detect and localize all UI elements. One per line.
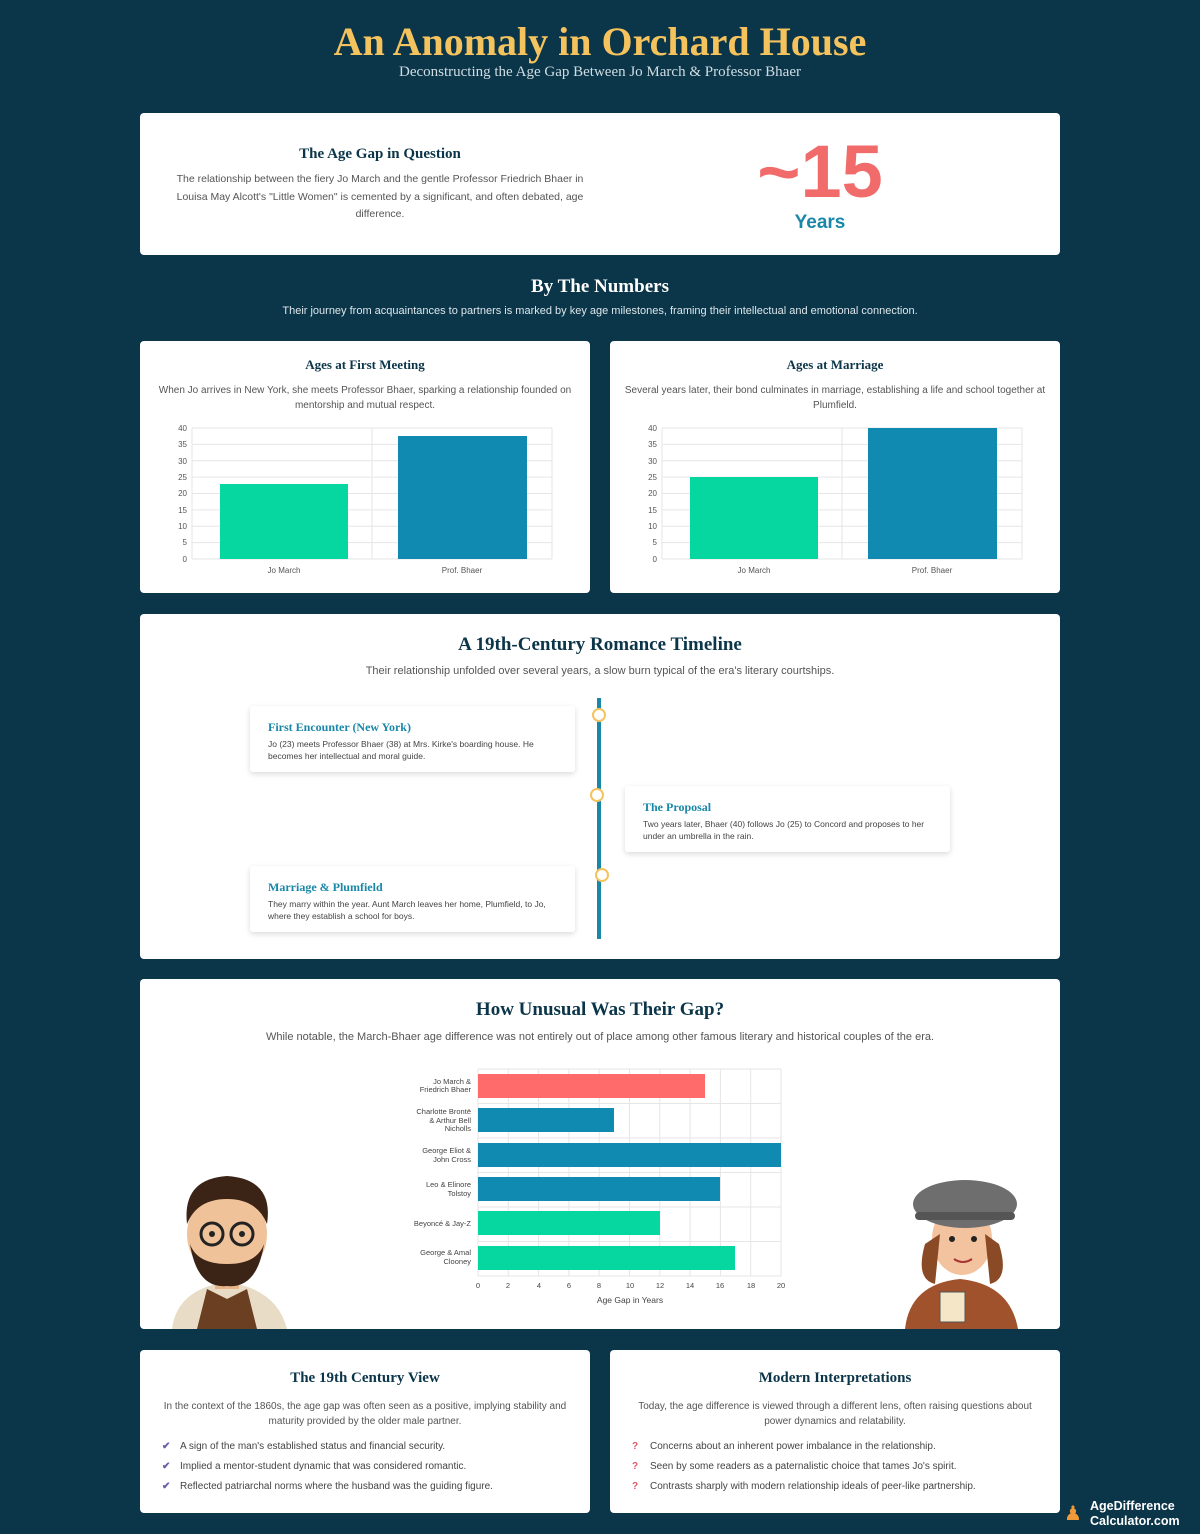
horizontal bar chart (414, 1068, 785, 1305)
panel: modern interpretations (610, 1350, 1060, 1513)
bar chart: 0 (653, 555, 658, 564)
panel: timeline: Their relationship unfolded over several years, a slow burn typical of the era's literary courtships. (366, 665, 834, 677)
horizontal bar chart: George & Amal (420, 1248, 471, 1257)
panel: modern interpretations: Contrasts sharply with modern relationship ideals of peer-like partnership. (650, 1481, 976, 1492)
panel: 19th century view: In the context of the 1860s, the age gap was often seen as a positive, implying stability and maturity provided by the older male partner. (164, 1401, 566, 1427)
panel: modern interpretations: Today, the age difference is viewed through a different lens, often raising questions about power dynamics and relatability. (638, 1401, 1032, 1427)
bar chart: Prof. Bhaer (442, 566, 483, 575)
event: proposal: Two years later, Bhaer (40) follows Jo (25) to Concord and proposes to her under an umbrella in the rain. (643, 819, 924, 841)
bar chart: 5 (183, 538, 188, 547)
bar chart: 5 (653, 538, 658, 547)
bar chart: 30 (178, 457, 188, 466)
event: first encounter: First Encounter (New York) (268, 720, 411, 734)
heading: by the numbers: By The Numbers (531, 276, 669, 297)
bar chart: 10 (648, 522, 658, 531)
logo: Calculator.com (1090, 1514, 1180, 1528)
horizontal bar chart: Tolstoy (448, 1189, 471, 1198)
event: marriage: Marriage & Plumfield (268, 880, 383, 894)
horizontal bar chart: Nicholls (445, 1124, 471, 1133)
bar chart: 20 (178, 489, 188, 498)
panel: comparison (140, 979, 1060, 1329)
bar chart: Jo March (268, 566, 300, 575)
text: by the numbers: Their journey from acquaintances to partners is marked by key age milestones, framing their intellectual and emotional connection. (282, 305, 918, 317)
horizontal bar chart: 2 (506, 1281, 510, 1290)
years label: Years (795, 212, 845, 233)
bar chart: 15 (648, 506, 658, 515)
horizontal bar chart: Beyoncé & Jay-Z (414, 1219, 471, 1228)
bar chart (178, 424, 552, 575)
bar chart: 40 (648, 424, 658, 433)
event: proposal: The Proposal (643, 800, 711, 814)
logo: AgeDifference (1090, 1499, 1175, 1513)
bar chart: 25 (178, 473, 188, 482)
bar chart: 20 (648, 489, 658, 498)
horizontal bar chart: & Arthur Bell (429, 1116, 471, 1125)
heading: The Age Gap in Question (299, 146, 461, 162)
panel: comparison: How Unusual Was Their Gap? (476, 999, 724, 1020)
horizontal bar chart: George Eliot & (422, 1146, 471, 1155)
bar chart: 35 (178, 440, 188, 449)
panel: modern interpretations: ? (632, 1481, 638, 1492)
panel: modern interpretations: Modern Interpretations (759, 1370, 911, 1386)
bar chart: 30 (648, 457, 658, 466)
panel: comparison: While notable, the March-Bhaer age difference was not entirely out of place among other famous literary and historical couples of the era. (266, 1031, 934, 1043)
bar chart: Prof. Bhaer (912, 566, 953, 575)
panel: marriage (610, 341, 1060, 593)
logo: ♟ (1064, 1503, 1082, 1525)
icon: professor bhaer illustration (172, 1176, 287, 1329)
horizontal bar chart: 8 (597, 1281, 601, 1290)
panel: 19th century view (140, 1350, 590, 1513)
horizontal bar chart: John Cross (433, 1155, 471, 1164)
bar chart: 15 (178, 506, 188, 515)
panel: modern interpretations: ? (632, 1441, 638, 1452)
horizontal bar chart: Age Gap in Years (597, 1295, 663, 1305)
panel: first meeting: Ages at First Meeting (305, 357, 425, 372)
horizontal bar chart: 6 (567, 1281, 571, 1290)
horizontal bar chart: 20 (777, 1281, 785, 1290)
title: An Anomaly in Orchard House (334, 19, 866, 64)
panel: first meeting: When Jo arrives in New York, she meets Professor Bhaer, sparking a relationship founded on mentorship and mutual respect. (159, 385, 571, 411)
panel: 19th century view: ✔ (162, 1481, 170, 1492)
panel: 19th century view: A sign of the man's established status and financial security. (180, 1441, 445, 1452)
event: marriage: They marry within the year. Aunt March leaves her home, Plumfield, to Jo, where they establish a school for boys. (268, 899, 546, 921)
horizontal bar chart: 16 (716, 1281, 724, 1290)
panel: timeline (140, 614, 1060, 959)
horizontal bar chart: Jo March & (433, 1077, 471, 1086)
horizontal bar chart: 14 (686, 1281, 694, 1290)
big number: ~15 (757, 130, 883, 213)
text: The relationship between the fiery Jo March and the gentle Professor Friedrich Bhaer in Louisa May Alcott's "Little Women" is cemented by a significant, and often debated, age difference. (177, 173, 583, 220)
horizontal bar chart: 4 (537, 1281, 541, 1290)
horizontal bar chart: 18 (747, 1281, 755, 1290)
panel: first meeting (140, 341, 590, 593)
panel: 19th century view: Reflected patriarchal norms where the husband was the guiding figure. (180, 1481, 493, 1492)
logo (1064, 1499, 1180, 1528)
panel: 19th century view: ✔ (162, 1461, 170, 1472)
bar chart: Jo March (738, 566, 770, 575)
panel: marriage: Several years later, their bond culminates in marriage, establishing a life and school together at Plumfield. (625, 385, 1045, 411)
subtitle: Deconstructing the Age Gap Between Jo March & Professor Bhaer (399, 64, 801, 80)
bar chart: 10 (178, 522, 188, 531)
event: first encounter (250, 706, 575, 772)
horizontal bar chart: Clooney (443, 1257, 471, 1266)
panel: 19th century view: The 19th Century View (290, 1370, 440, 1386)
event: marriage (250, 866, 575, 932)
timeline line (597, 698, 601, 939)
panel: modern interpretations: Concerns about an inherent power imbalance in the relationship. (650, 1441, 936, 1452)
bar chart: 25 (648, 473, 658, 482)
dots (592, 708, 606, 722)
horizontal bar chart: Friedrich Bhaer (420, 1085, 471, 1094)
panel: modern interpretations: Seen by some readers as a paternalistic choice that tames Jo's spirit. (650, 1461, 956, 1472)
icon: jo march illustration (905, 1180, 1018, 1329)
horizontal bar chart: 12 (656, 1281, 664, 1290)
horizontal bar chart: Leo & Elinore (426, 1180, 471, 1189)
bar chart: 40 (178, 424, 188, 433)
panel: marriage: Ages at Marriage (787, 357, 883, 372)
event: first encounter: Jo (23) meets Professor Bhaer (38) at Mrs. Kirke's boarding house. He becomes her intellectual and moral guide. (268, 739, 534, 761)
bar chart (648, 424, 1022, 575)
horizontal bar chart: 0 (476, 1281, 480, 1290)
horizontal bar chart: Charlotte Brontë (416, 1107, 471, 1116)
event: proposal (625, 786, 950, 852)
panel: timeline: A 19th-Century Romance Timeline (458, 634, 742, 655)
panel: 19th century view: Implied a mentor-student dynamic that was considered romantic. (180, 1461, 466, 1472)
bar chart: 0 (183, 555, 188, 564)
panel: age gap (140, 113, 1060, 255)
horizontal bar chart: 10 (626, 1281, 634, 1290)
panel: modern interpretations: ? (632, 1461, 638, 1472)
bar chart: 35 (648, 440, 658, 449)
panel: 19th century view: ✔ (162, 1441, 170, 1452)
